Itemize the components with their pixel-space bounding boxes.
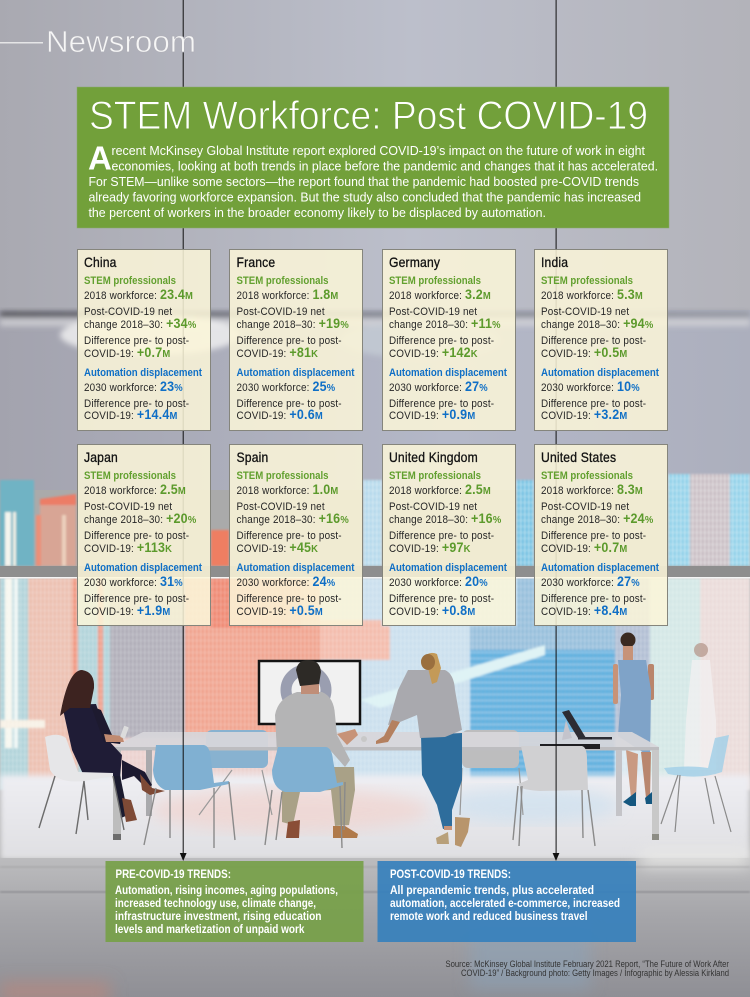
card: United Kingdom: Post-COVID-19 net — [389, 502, 477, 513]
card: United States: Difference pre- to post- — [541, 594, 647, 605]
card: France: COVID-19: +81K — [237, 344, 319, 360]
card: United Kingdom: 2030 workforce: 20% — [389, 573, 488, 589]
panel: intro — [77, 87, 669, 228]
card: Spain: Automation displacement — [236, 562, 355, 574]
card: Germany: 2018 workforce: 3.2M — [389, 286, 491, 302]
panel: post-COVID trends: automation, accelerated e-commerce, increased — [390, 898, 620, 910]
panel: post-COVID trends: remote work and reduced business travel — [390, 911, 588, 923]
card: France: Automation displacement — [236, 367, 355, 379]
card: United Kingdom — [382, 444, 516, 626]
card: China: change 2018–30: +34% — [84, 315, 196, 331]
card: Germany: change 2018–30: +11% — [389, 315, 501, 331]
panel: post-COVID trends — [378, 861, 636, 942]
person: seated man — [275, 660, 358, 838]
card: Japan: Japan — [84, 449, 118, 465]
card: United States: change 2018–30: +24% — [541, 510, 653, 526]
person: standing woman at right — [613, 632, 654, 806]
card: Spain: Post-COVID-19 net — [237, 502, 325, 513]
card: United Kingdom: STEM professionals — [389, 470, 481, 482]
card: Japan: 2018 workforce: 2.5M — [84, 481, 186, 497]
card: Spain — [230, 444, 362, 626]
card: Spain: Difference pre- to post- — [237, 531, 342, 542]
person: standing woman at center — [361, 653, 470, 847]
card: United States: Automation displacement — [541, 562, 659, 574]
card: Spain: 2018 workforce: 1.0M — [237, 481, 338, 497]
arrow: pre-COVID line — [180, 0, 187, 861]
panel: pre-COVID trends: PRE-COVID-19 TRENDS: — [116, 869, 231, 881]
chair: left white — [39, 735, 124, 834]
card: Germany: Post-COVID-19 net — [389, 307, 477, 318]
intro paragraph: the percent of workers in the broader economy likely to be displaced by automation. — [88, 205, 546, 220]
card: India: Post-COVID-19 net — [541, 307, 629, 318]
chair: front blue left — [144, 745, 235, 848]
card: India: COVID-19: +3.2M — [541, 406, 627, 422]
card: Germany: COVID-19: +0.9M — [389, 406, 475, 422]
card: India: 2018 workforce: 5.3M — [541, 286, 643, 302]
card: China: Automation displacement — [84, 367, 202, 379]
card: China — [78, 250, 210, 430]
card: France: France — [237, 254, 275, 270]
card: France: COVID-19: +0.6M — [237, 406, 323, 422]
card: United States: 2030 workforce: 27% — [541, 573, 640, 589]
monitor — [259, 661, 360, 724]
card: China: STEM professionals — [84, 275, 176, 287]
card: Germany: Difference pre- to post- — [389, 399, 495, 410]
card: India: Automation displacement — [541, 367, 659, 379]
panel: pre-COVID trends: levels and marketization of unpaid work — [115, 924, 305, 936]
card: Germany: Automation displacement — [389, 367, 507, 379]
card: Germany: COVID-19: +142K — [389, 344, 478, 360]
card: Japan: 2030 workforce: 31% — [84, 573, 183, 589]
card: China: Difference pre- to post- — [84, 336, 190, 347]
intro paragraph: recent McKinsey Global Institute report explored COVID-19’s impact on the future of work in eight — [112, 143, 645, 158]
table — [113, 732, 659, 840]
card: United States: COVID-19: +0.7M — [541, 539, 627, 555]
card: United States: United States — [541, 449, 616, 465]
chair: front blue center — [265, 747, 345, 848]
card: United Kingdom: Automation displacement — [389, 562, 507, 574]
card: India: 2030 workforce: 10% — [541, 378, 640, 394]
card: Japan: COVID-19: +113K — [84, 539, 173, 555]
card: Spain: change 2018–30: +16% — [237, 510, 349, 526]
card: France: 2018 workforce: 1.8M — [237, 286, 338, 302]
card: Japan: COVID-19: +1.9M — [84, 602, 170, 618]
panel: post-COVID trends: POST-COVID-19 TRENDS: — [390, 869, 511, 881]
card: Germany: Germany — [389, 254, 441, 270]
card: France: 2030 workforce: 25% — [237, 378, 335, 394]
chair: front white right — [513, 746, 595, 846]
intro paragraph: already favoring workforce expansion. But the study also concluded that the pandemic has increased — [88, 190, 641, 204]
card: China: Difference pre- to post- — [84, 399, 190, 410]
panel: post-COVID trends: All prepandemic trends, plus accelerated — [390, 885, 594, 897]
card: France — [230, 250, 362, 430]
panel: pre-COVID trends: infrastructure investment, rising education — [115, 911, 322, 923]
card: Germany: Difference pre- to post- — [389, 336, 495, 347]
card: Spain: STEM professionals — [236, 470, 328, 482]
card: India — [534, 250, 668, 430]
chair: right translucent — [661, 735, 731, 832]
chair: back gray — [460, 730, 523, 815]
card: China: China — [84, 254, 117, 270]
panel: pre-COVID trends: increased technology use, climate change, — [115, 898, 316, 910]
card: Spain: 2030 workforce: 24% — [237, 573, 335, 589]
card: United States: Difference pre- to post- — [541, 531, 647, 542]
card: Japan — [78, 444, 210, 626]
chair: back blue — [199, 730, 272, 815]
card: United Kingdom: COVID-19: +97K — [389, 539, 471, 555]
card: United Kingdom: COVID-19: +0.8M — [389, 602, 475, 618]
card: India: STEM professionals — [541, 275, 633, 287]
card: Japan: STEM professionals — [84, 470, 176, 482]
card: Germany: 2030 workforce: 27% — [389, 378, 488, 394]
card: United States: COVID-19: +8.4M — [541, 602, 627, 618]
card: United Kingdom: Difference pre- to post- — [389, 531, 495, 542]
intro paragraph — [88, 140, 658, 220]
person: ghost reflection — [684, 643, 716, 770]
panel: pre-COVID trends — [106, 861, 364, 942]
card: Spain: Difference pre- to post- — [237, 594, 342, 605]
card: United States: 2018 workforce: 8.3M — [541, 481, 643, 497]
intro paragraph: economies, looking at both trends in place before the pandemic and changes that it has accelerated. — [112, 158, 658, 174]
title: STEM Workforce: Post COVID-19 — [89, 94, 648, 138]
card: China: COVID-19: +0.7M — [84, 344, 170, 360]
card: United States: Post-COVID-19 net — [541, 502, 629, 513]
card: China: 2030 workforce: 23% — [84, 378, 183, 394]
card: Spain: COVID-19: +45K — [237, 539, 319, 555]
card: China: COVID-19: +14.4M — [84, 406, 178, 422]
card: Japan: Automation displacement — [84, 562, 202, 574]
card: Spain: Spain — [237, 449, 268, 465]
card: Japan: change 2018–30: +20% — [84, 510, 196, 526]
arrow: post-COVID line — [553, 0, 559, 861]
card: France: Post-COVID-19 net — [237, 307, 325, 318]
source credit — [446, 959, 729, 978]
intro paragraph: For STEM—unlike some sectors—the report found that the pandemic had boosted pre-COVID trends — [88, 174, 639, 189]
card: Spain: COVID-19: +0.5M — [237, 602, 323, 618]
card: United Kingdom: Difference pre- to post- — [389, 594, 495, 605]
card: France: change 2018–30: +19% — [237, 315, 349, 331]
card: France: Difference pre- to post- — [237, 399, 342, 410]
newsroom heading: Newsroom — [46, 24, 196, 59]
card: United Kingdom: 2018 workforce: 2.5M — [389, 481, 491, 497]
card: China: 2018 workforce: 23.4M — [84, 286, 193, 302]
card: United Kingdom: United Kingdom — [389, 449, 478, 465]
card: United States — [534, 444, 668, 626]
card: Japan: Post-COVID-19 net — [84, 502, 172, 513]
card: China: Post-COVID-19 net — [84, 307, 172, 318]
tablet — [562, 710, 612, 740]
card: United States: STEM professionals — [541, 470, 633, 482]
card: India: Difference pre- to post- — [541, 336, 647, 347]
card: Japan: Difference pre- to post- — [84, 531, 190, 542]
card: Germany — [382, 250, 516, 430]
card: India: COVID-19: +0.5M — [541, 344, 627, 360]
panel: pre-COVID trends: Automation, rising incomes, aging populations, — [115, 885, 338, 897]
card: India: change 2018–30: +94% — [541, 315, 653, 331]
card: Germany: STEM professionals — [389, 275, 481, 287]
card: France: Difference pre- to post- — [237, 336, 342, 347]
card: India: India — [541, 254, 569, 270]
card: Japan: Difference pre- to post- — [84, 594, 190, 605]
card: India: Difference pre- to post- — [541, 399, 647, 410]
card: France: STEM professionals — [236, 275, 328, 287]
card: United Kingdom: change 2018–30: +16% — [389, 510, 501, 526]
intro paragraph: A — [88, 140, 112, 176]
person: seated woman at left — [60, 670, 165, 822]
